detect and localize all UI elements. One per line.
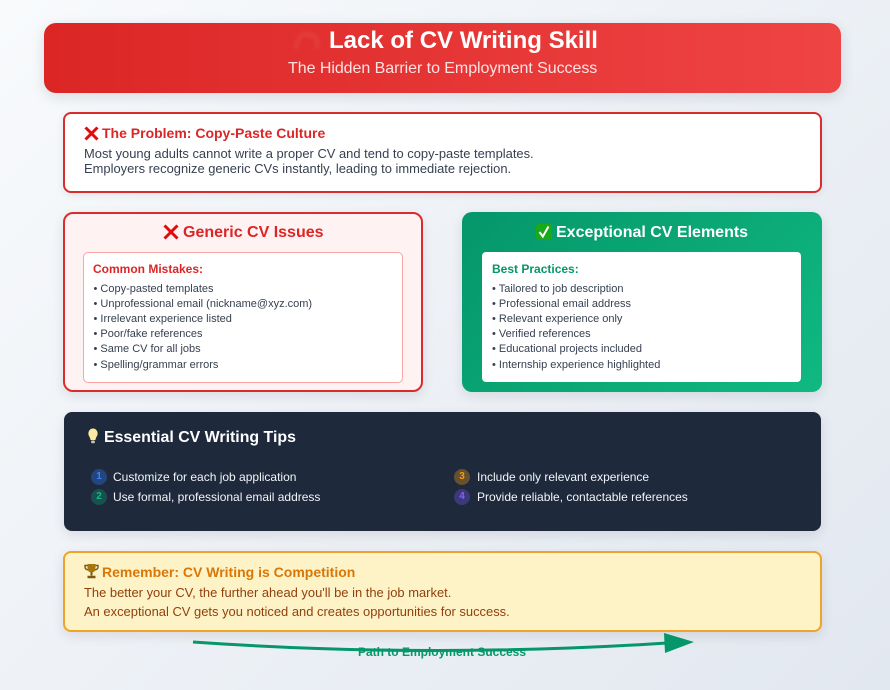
panel: exceptional CV elements xyxy=(462,212,822,392)
tip 2: Use formal, professional email address xyxy=(113,490,320,504)
panel: generic CV issues xyxy=(63,212,423,392)
panel: the problem xyxy=(63,112,822,193)
title: Lack of CV Writing Skill xyxy=(329,26,598,54)
mistakes list: • Irrelevant experience listed xyxy=(94,313,232,325)
tip 1: 1 xyxy=(96,471,102,482)
mistakes list: • Spelling/grammar errors xyxy=(94,359,218,371)
mistakes list: • Same CV for all jobs xyxy=(94,343,201,355)
problem text: Employers recognize generic CVs instantly, leading to immediate rejection. xyxy=(84,161,511,176)
mistakes list xyxy=(94,282,312,371)
icon: green check xyxy=(536,224,552,240)
icon: red cross xyxy=(84,126,98,140)
mistakes card xyxy=(83,252,403,383)
best practices list: • Tailored to job description xyxy=(492,282,623,294)
subtitle: The Hidden Barrier to Employment Success xyxy=(288,60,597,76)
icon: trophy xyxy=(84,564,99,578)
best practices list: • Educational projects included xyxy=(492,343,642,355)
remember heading: Remember: CV Writing is Competition xyxy=(102,564,355,580)
icon: red cross xyxy=(164,224,178,240)
mistakes list: • Copy-pasted templates xyxy=(94,282,214,294)
panel: remember callout xyxy=(63,551,822,632)
panel: essential tips xyxy=(64,412,821,531)
tip 2: 2 xyxy=(96,491,102,502)
best practices card xyxy=(482,252,801,382)
remember text xyxy=(84,584,510,619)
tip 4: 4 xyxy=(459,491,465,502)
best practices list: • Verified references xyxy=(492,328,591,340)
remember text: The better your CV, the further ahead you'll be in the job market. xyxy=(84,584,451,600)
icon: faint header emblem xyxy=(295,33,318,48)
problem text xyxy=(84,146,534,176)
tips heading: Essential CV Writing Tips xyxy=(104,428,296,446)
mistakes heading: Common Mistakes: xyxy=(93,262,203,276)
best practices heading: Best Practices: xyxy=(492,262,579,276)
icon: light bulb xyxy=(88,428,98,444)
best practices list: • Professional email address xyxy=(492,298,631,310)
best practices list: • Internship experience highlighted xyxy=(492,359,660,371)
problem text: Most young adults cannot write a proper CV and tend to copy-paste templates. xyxy=(84,146,534,161)
arrow: path to employment success: Path to Employment Success xyxy=(358,645,526,659)
mistakes list: • Poor/fake references xyxy=(94,328,203,340)
arrow: path to employment success xyxy=(192,633,694,659)
tip 3: Include only relevant experience xyxy=(477,470,649,484)
problem heading: The Problem: Copy-Paste Culture xyxy=(102,124,325,140)
remember text: An exceptional CV gets you noticed and creates opportunities for success. xyxy=(84,604,510,619)
tip 3: 3 xyxy=(459,471,465,482)
best practices list: • Relevant experience only xyxy=(492,313,622,325)
exceptional heading: Exceptional CV Elements xyxy=(556,224,748,241)
best practices list xyxy=(492,282,660,371)
tip 1: Customize for each job application xyxy=(113,470,296,484)
mistakes list: • Unprofessional email (nickname@xyz.com) xyxy=(94,298,312,310)
generic heading: Generic CV Issues xyxy=(183,224,324,241)
header banner xyxy=(44,23,841,93)
tip 4: Provide reliable, contactable references xyxy=(477,490,688,504)
